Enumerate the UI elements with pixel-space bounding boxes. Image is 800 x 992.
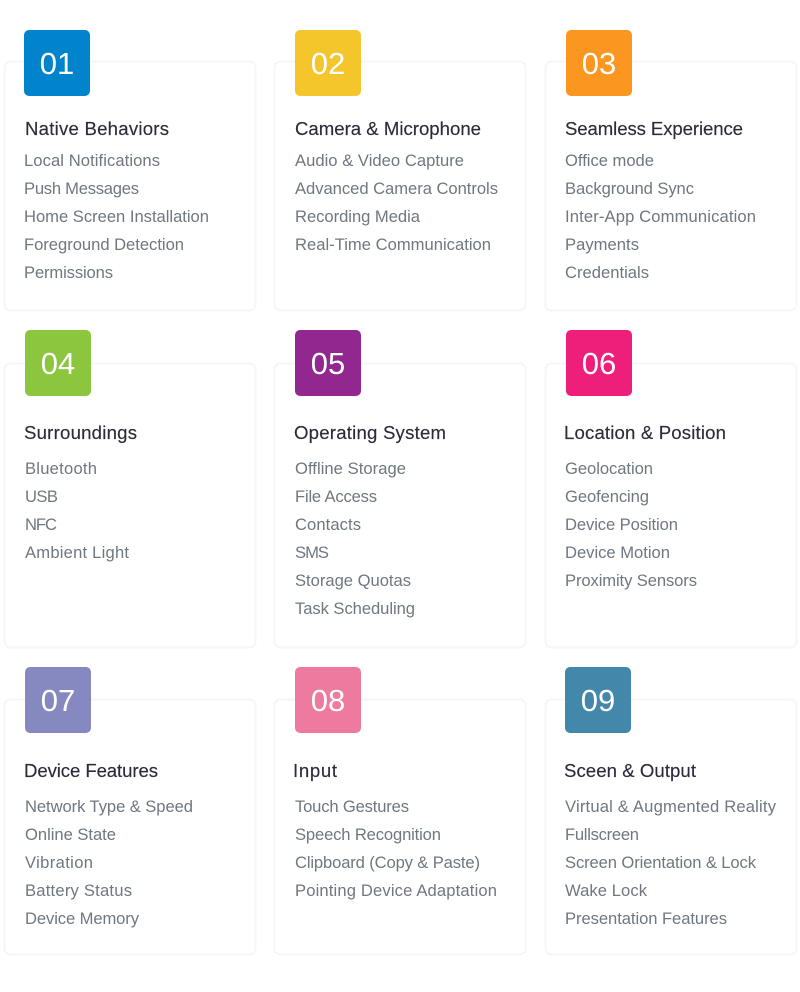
list: Surroundings items: Ambient Light xyxy=(25,543,129,562)
list: Native Behaviors items xyxy=(24,151,209,282)
panel: 05 Operating System xyxy=(274,330,526,648)
list: Native Behaviors items: Local Notifications xyxy=(24,151,160,170)
list: Seamless Experience items: Credentials xyxy=(565,263,649,282)
list: Operating System items: Task Scheduling xyxy=(295,599,415,618)
panel: 06 Location & Position xyxy=(546,330,796,648)
list: Location & Position items: Device Motion xyxy=(565,543,670,562)
heading: Seamless Experience: Seamless Experience xyxy=(565,118,743,139)
list: Device Features items: Vibration xyxy=(25,853,93,872)
list: Location & Position items: Geofencing xyxy=(565,487,649,506)
list: Camera & Microphone items: Advanced Camera Controls xyxy=(295,179,498,198)
list: Operating System items: Contacts xyxy=(295,515,361,534)
list: Native Behaviors items: Permissions xyxy=(24,263,113,282)
list: Device Features items: Battery Status xyxy=(25,881,132,900)
list: Location & Position items xyxy=(565,459,697,590)
badge: 02: 02 xyxy=(311,46,345,81)
badge: 07 xyxy=(25,667,91,733)
list: Camera & Microphone items xyxy=(295,151,498,254)
list: Device Features items: Device Memory xyxy=(25,909,140,928)
list: Sceen & Output items: Screen Orientation & Lock xyxy=(565,853,757,872)
list: Input items: Touch Gestures xyxy=(295,797,409,816)
panel: 08 Input xyxy=(274,667,526,954)
list: Operating System items: SMS xyxy=(295,543,329,562)
list: Sceen & Output items: Presentation Features xyxy=(565,909,727,928)
list: Surroundings items: USB xyxy=(25,487,58,506)
badge: 03: 03 xyxy=(582,46,616,81)
badge: 02 xyxy=(295,30,361,96)
badge: 03 xyxy=(566,30,632,96)
badge: 07: 07 xyxy=(41,683,75,718)
heading: Surroundings: Surroundings xyxy=(24,422,137,443)
list: Native Behaviors items: Home Screen Installation xyxy=(24,207,209,226)
list: Device Features items: Network Type & Speed xyxy=(25,797,193,816)
list: Input items: Pointing Device Adaptation xyxy=(295,881,497,900)
list: Location & Position items: Geolocation xyxy=(565,459,653,478)
list: Seamless Experience items: Inter-App Communication xyxy=(565,207,756,226)
list: Input items: Clipboard (Copy & Paste) xyxy=(295,853,480,872)
heading: Device Features: Device Features xyxy=(24,760,158,781)
list: Seamless Experience items: Background Sync xyxy=(565,179,694,198)
heading: Input: Input xyxy=(293,760,338,781)
list: Surroundings items: Bluetooth xyxy=(25,459,97,478)
list: Operating System items: Storage Quotas xyxy=(295,571,411,590)
badge: 08 xyxy=(295,667,361,733)
list: Seamless Experience items: Office mode xyxy=(565,151,654,170)
badge: 05 xyxy=(295,330,361,396)
panel: 09 Sceen & Output xyxy=(546,667,796,954)
panel: 07 Device Features xyxy=(4,667,256,954)
badge: 06: 06 xyxy=(582,346,616,381)
list: Input items: Speech Recognition xyxy=(295,825,441,844)
badge: 01: 01 xyxy=(40,46,74,81)
list: Sceen & Output items: Wake Lock xyxy=(565,881,648,900)
badge: 04: 04 xyxy=(41,346,75,381)
list: Location & Position items: Proximity Sensors xyxy=(565,571,697,590)
list: Camera & Microphone items: Recording Media xyxy=(295,207,421,226)
heading: Camera & Microphone: Camera & Microphone xyxy=(295,118,481,139)
heading: Sceen & Output: Sceen & Output xyxy=(564,760,697,781)
list: Operating System items: File Access xyxy=(295,487,377,506)
list: Seamless Experience items xyxy=(565,151,756,282)
heading: Operating System: Operating System xyxy=(294,422,446,443)
badge: 05: 05 xyxy=(311,346,345,381)
list: Location & Position items: Device Position xyxy=(565,515,678,534)
badge: 04 xyxy=(25,330,91,396)
heading: Native Behaviors: Native Behaviors xyxy=(25,118,169,139)
list: Camera & Microphone items: Audio & Video Capture xyxy=(295,151,464,170)
list: Surroundings items xyxy=(25,459,129,562)
list: Sceen & Output items: Virtual & Augmented Reality xyxy=(565,797,777,816)
list: Seamless Experience items: Payments xyxy=(565,235,639,254)
list: Device Features items: Online State xyxy=(25,825,116,844)
badge: 09 xyxy=(565,667,631,733)
list: Input items xyxy=(295,797,497,900)
badge: 08: 08 xyxy=(311,683,345,718)
list: Device Features items xyxy=(25,797,193,928)
panel: 01 Native Behaviors xyxy=(4,30,256,310)
list: Operating System items: Offline Storage xyxy=(295,459,406,478)
list: Surroundings items: NFC xyxy=(25,515,57,534)
panel: 04 Surroundings xyxy=(4,330,256,648)
list: Operating System items xyxy=(295,459,415,618)
panel: 02 Camera & Microphone xyxy=(274,30,526,310)
list: Sceen & Output items xyxy=(565,797,777,928)
heading: Location & Position: Location & Position xyxy=(564,422,726,443)
list: Native Behaviors items: Foreground Detection xyxy=(24,235,184,254)
list: Native Behaviors items: Push Messages xyxy=(24,179,139,198)
badge: 01 xyxy=(24,30,90,96)
panel: 03 Seamless Experience xyxy=(546,30,796,310)
list: Camera & Microphone items: Real-Time Communication xyxy=(295,235,491,254)
badge: 09: 09 xyxy=(581,683,615,718)
badge: 06 xyxy=(566,330,632,396)
list: Sceen & Output items: Fullscreen xyxy=(565,825,639,844)
